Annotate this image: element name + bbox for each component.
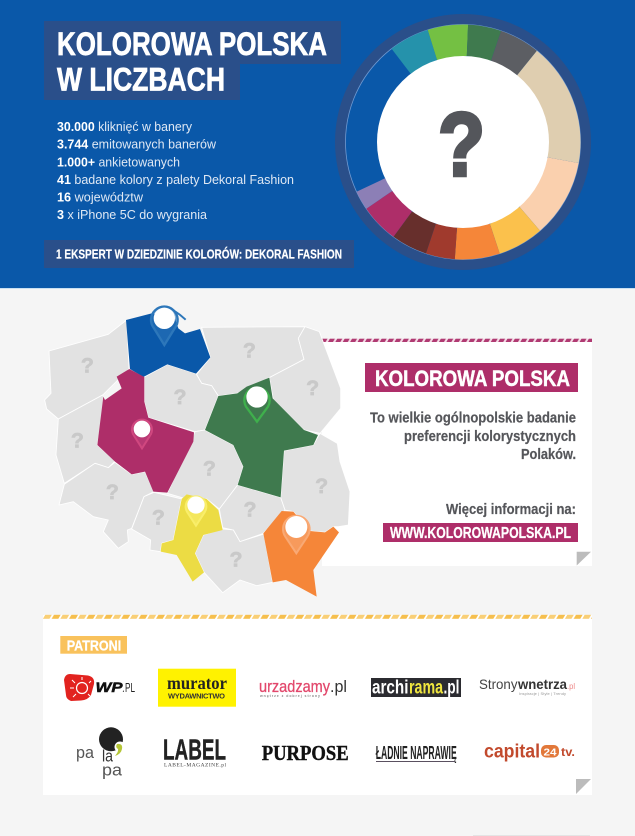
logo: pa la pa: pa (76, 743, 95, 762)
logo: pa la pa: la (102, 747, 113, 766)
logo: archirama.pl (371, 678, 461, 698)
logo: murator: murator (167, 673, 227, 693)
question marks: ? (173, 385, 187, 409)
logo: murator (158, 669, 236, 707)
page fold (576, 779, 591, 794)
region: blue (126, 313, 210, 377)
statistics list (57, 119, 294, 222)
page fold (577, 552, 591, 566)
panel: about (322, 339, 592, 566)
question mark: ? (438, 96, 485, 196)
statistics list: 3.744 emitowanych banerów (57, 137, 217, 152)
logo: wp.pl: WP (96, 679, 123, 695)
pin: green (244, 386, 270, 422)
logo: urzadzamy.pl: .pl (330, 677, 347, 696)
question marks (71, 338, 328, 572)
logo: stronywnetrza.pl (479, 676, 575, 696)
logo: pa la pa (76, 727, 126, 780)
question marks: ? (152, 506, 165, 530)
question marks: ? (315, 474, 328, 498)
logo: stronywnetrza.pl: Strony (479, 676, 518, 692)
statistics list: 1.000+ ankietowanych (57, 154, 180, 169)
map of Poland (45, 307, 350, 597)
about description: preferencji kolorystycznych (404, 428, 576, 445)
logo: label (163, 734, 226, 769)
region: orange (263, 511, 339, 597)
website link: WWW.KOLOROWAPOLSKA.PL (390, 525, 571, 542)
question marks: ? (203, 457, 216, 481)
logo: wp.pl: . (122, 680, 125, 695)
region: green (205, 378, 318, 497)
expert banner (44, 240, 354, 268)
logo: murator: WYDAWNICTWO (168, 692, 225, 701)
logo: wp.pl: PL (125, 680, 135, 695)
about description (370, 410, 576, 463)
logo: label: LABEL (163, 734, 226, 766)
title: W LICZBACH (57, 62, 225, 98)
question marks: ? (229, 548, 243, 572)
logo: capital 24 tv: tv. (561, 745, 575, 759)
question marks: ? (243, 497, 257, 521)
logo: urzadzamy.pl: wnętrze z dobrej strony (259, 694, 320, 698)
pin: yellow (186, 496, 206, 526)
region: yellow (161, 494, 223, 582)
statistics list: 16 województw (57, 190, 144, 204)
pin: orange (283, 516, 310, 553)
logo: archirama.pl: archi (372, 678, 408, 698)
logo: stronywnetrza.pl: .pl (567, 682, 575, 691)
logo: ladnie naprawie (376, 742, 457, 763)
question marks: ? (243, 338, 256, 362)
statistics list: 3 x iPhone 5C do wygrania (57, 207, 208, 222)
logo: capital 24 tv: capital (484, 741, 540, 762)
patrons heading: PATRONI (67, 638, 121, 654)
logo: archirama.pl: rama (409, 678, 443, 698)
question marks: ? (71, 428, 84, 452)
statistics list: 41 badane kolory z palety Dekoral Fashion (57, 172, 294, 187)
question marks: ? (306, 376, 319, 400)
about description: To wielkie ogólnopolskie badanie (370, 410, 576, 427)
more info label: Więcej informacji na: (446, 501, 576, 518)
question marks: ? (81, 353, 94, 377)
logo: stronywnetrza.pl: wnetrza (517, 676, 567, 692)
logo: capital 24 tv (484, 741, 575, 762)
region: magenta (97, 369, 194, 493)
question marks: ? (106, 480, 119, 504)
about heading: KOLOROWA POLSKA (375, 366, 570, 391)
panel: patrons: ŁADNIE NAPRAWIĘ (376, 742, 457, 763)
panel: patrons (43, 615, 592, 795)
donut chart (335, 14, 591, 270)
logo: archirama.pl: .pl (444, 678, 460, 698)
expert banner: 1 EKSPERT W DZIEDZINIE KOLORÓW: DEKORAL FASHION (56, 246, 342, 262)
logo: wp.pl (64, 674, 135, 701)
logo: pa la pa: pa (102, 761, 123, 780)
title (44, 21, 341, 100)
logo: capital 24 tv: 24 (544, 746, 557, 758)
pin: blue (151, 307, 186, 345)
logo: stronywnetrza.pl: Inspiracje | Style | Trendy (519, 691, 566, 696)
title: KOLOROWA POLSKA (57, 26, 327, 62)
logo: purpose: PURPOSE (262, 741, 349, 765)
logo: label: LABEL-MAGAZINE.pl (164, 763, 226, 769)
about description: Polaków. (521, 446, 576, 463)
pin: magenta (132, 420, 152, 448)
statistics list: 30.000 kliknięć w banery (57, 119, 192, 134)
logo: urzadzamy.pl: urzadzamy (259, 677, 330, 696)
header panel (0, 0, 635, 289)
